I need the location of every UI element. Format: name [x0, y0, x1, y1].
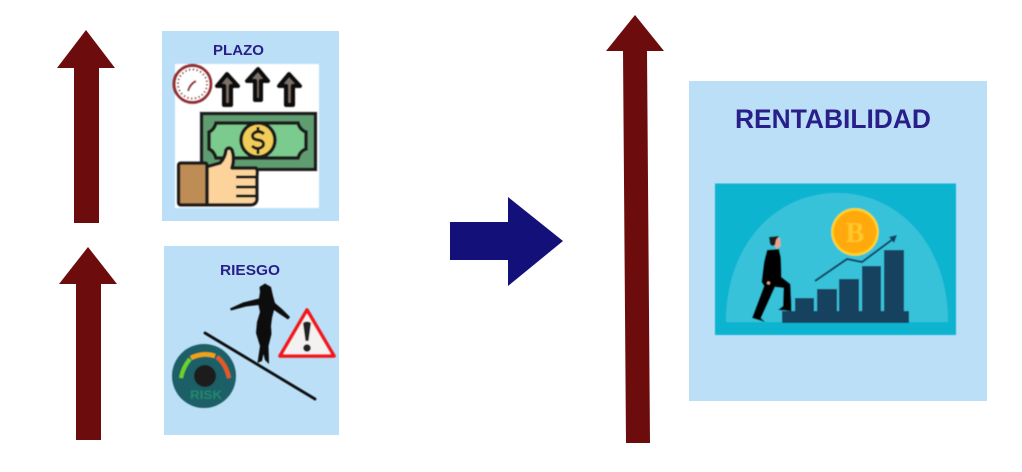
panel: riesgo: [164, 246, 339, 435]
bar chart: rising bars: [782, 250, 909, 323]
icon: bitcoin coin: B: [846, 218, 864, 249]
arrow: riesgo up: [59, 247, 117, 440]
image: plazo illustration: [174, 64, 319, 208]
arrow: leads to: [450, 197, 563, 286]
image: riesgo illustration: [172, 284, 334, 408]
arrow: rentabilidad up: [606, 15, 664, 443]
icon: banknote: [202, 114, 316, 170]
icon: businessman climbing: [752, 236, 792, 322]
image: rentabilidad illustration: [715, 184, 956, 335]
icon: risk gauge: [172, 344, 236, 408]
heading: riesgo: RIESGO: [220, 262, 280, 279]
icon: risk gauge: RISK: [190, 388, 222, 402]
heading: plazo: PLAZO: [213, 42, 264, 59]
icon: clock: [174, 66, 211, 102]
icon: bitcoin coin: [832, 210, 878, 254]
icon: balancing woman silhouette: [230, 284, 290, 364]
panel: rentabilidad: [689, 81, 987, 401]
icon: warning triangle: [280, 310, 334, 356]
icon: thumbs-up hand: [178, 148, 257, 205]
trend arrow: [815, 235, 897, 281]
tightrope line: [205, 333, 315, 399]
arrow: plazo up: [57, 30, 115, 223]
background dome: [726, 193, 948, 322]
icon: three up arrows: [217, 69, 300, 105]
heading: rentabilidad: RENTABILIDAD: [735, 104, 931, 134]
panel: plazo: [162, 31, 339, 221]
